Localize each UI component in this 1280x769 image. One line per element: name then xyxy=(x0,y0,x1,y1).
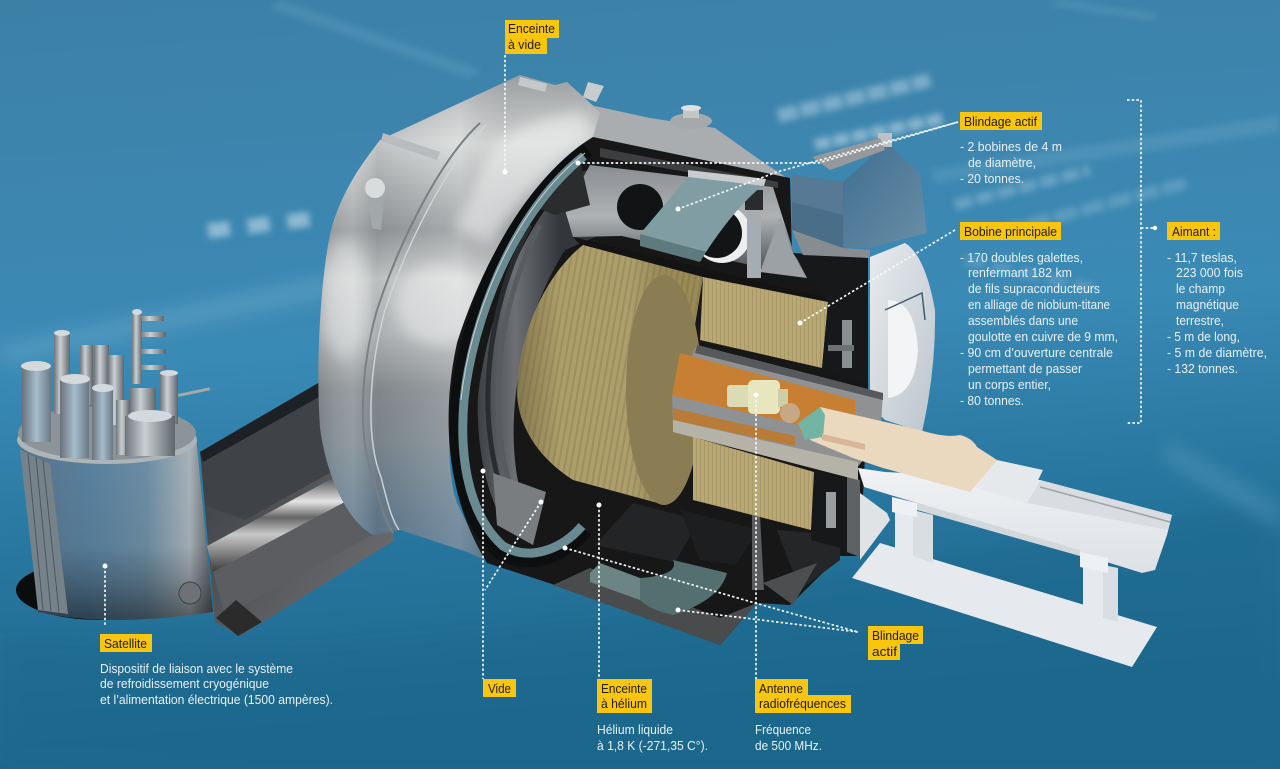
text: satellite details: et l’alimentation électrique (1500 ampères). xyxy=(100,692,333,707)
label: Enceinte à vide: Enceinte xyxy=(508,21,555,36)
text: aimant details: - 5 m de diamètre, xyxy=(1167,345,1267,360)
text: blindage actif details: - 2 bobines de 4 m xyxy=(960,139,1062,154)
text: bobine principale details: un corps entier, xyxy=(968,377,1051,392)
text: satellite details: de refroidissement cryogénique xyxy=(100,676,269,691)
leader lines and anchor dots xyxy=(102,55,958,679)
text: bobine principale details: - 80 tonnes. xyxy=(960,393,1024,408)
main coil (cylinder) xyxy=(517,245,828,530)
label: Satellite: Satellite xyxy=(104,636,147,651)
text: satellite details xyxy=(100,661,333,707)
label: Blindage actif (top): Blindage actif xyxy=(964,114,1037,129)
text: frequency details: Fréquence xyxy=(755,722,811,737)
rear dome behind the cut xyxy=(580,105,790,180)
label: Enceinte à vide: à vide xyxy=(508,37,541,52)
tank-top cylinders xyxy=(54,314,178,455)
label: Enceinte à hélium: Enceinte xyxy=(601,681,647,696)
patient table xyxy=(852,460,1172,667)
satellite pit and pipe xyxy=(200,382,395,636)
white end cap xyxy=(847,243,935,560)
arcs between ring and coil xyxy=(498,225,540,500)
lower cradle shapes xyxy=(595,503,700,562)
text: aimant details: - 5 m de long, xyxy=(1167,329,1240,344)
right-hand electronics block xyxy=(792,133,927,550)
text: blindage actif details: - 20 tonnes. xyxy=(960,171,1024,186)
patient xyxy=(780,403,997,492)
text: bobine principale details: renfermant 182 km xyxy=(968,265,1072,280)
text: bobine principale details: en alliage de niobium-titane xyxy=(968,297,1110,312)
text: satellite details: Dispositif de liaison avec le système xyxy=(100,661,293,676)
text: aimant details: le champ xyxy=(1176,281,1225,296)
text: helium details: Hélium liquide xyxy=(597,722,673,737)
text: bobine principale details xyxy=(960,250,1118,408)
label: Aimant: Aimant : xyxy=(1172,224,1216,239)
label: Blindage actif (bottom) xyxy=(868,626,923,660)
active shielding ring (teal) xyxy=(457,150,588,560)
text: bobine principale details: permettant de passer xyxy=(968,361,1083,376)
label: Antenne radiofréquences xyxy=(755,679,851,713)
active shielding coil: bottom xyxy=(590,560,727,615)
label: Blindage actif (bottom): actif xyxy=(872,644,897,659)
active shielding coil: top xyxy=(640,170,766,262)
label: Vide xyxy=(483,679,516,697)
text: aimant details: 223 000 fois xyxy=(1176,265,1243,280)
label: Enceinte à hélium xyxy=(597,679,652,713)
label: Enceinte à vide xyxy=(505,20,559,54)
text: aimant details: magnétique xyxy=(1176,297,1239,312)
magnet: cut-away interior xyxy=(449,137,868,645)
text: blindage actif details: de diamètre, xyxy=(968,155,1036,170)
label: Enceinte à hélium: à hélium xyxy=(601,696,647,711)
label: Bobine principale: Bobine principale xyxy=(964,224,1057,239)
text: frequency details xyxy=(755,722,822,753)
text: frequency details: de 500 MHz. xyxy=(755,738,822,753)
label: Blindage actif (bottom): Blindage xyxy=(872,628,919,643)
text: aimant details: terrestre, xyxy=(1176,313,1224,328)
text: blindage actif details xyxy=(960,139,1062,186)
left lit area between ring and coil xyxy=(478,170,600,525)
upper bay xyxy=(565,165,807,278)
label: Antenne radiofréquences: Antenne xyxy=(759,681,803,696)
text: bobine principale details: de fils supraconducteurs xyxy=(968,281,1100,296)
text: aimant details xyxy=(1167,250,1267,376)
text: bobine principale details: - 170 doubles galettes, xyxy=(960,250,1083,265)
text: bobine principale details: assemblés dans une xyxy=(968,313,1078,328)
text: aimant details: - 132 tonnes. xyxy=(1167,361,1238,376)
magnet: steel vessel xyxy=(318,75,790,560)
vessel fittings xyxy=(381,133,440,160)
label: Antenne radiofréquences: radiofréquences xyxy=(759,696,846,711)
label: Vide: Vide xyxy=(488,681,511,696)
text: helium details xyxy=(597,722,708,753)
bore with orange lining xyxy=(672,345,883,480)
bracket: aimant xyxy=(1127,100,1157,423)
RF antenna xyxy=(727,380,788,414)
satellite tank xyxy=(16,309,213,620)
text: aimant details: - 11,7 teslas, xyxy=(1167,250,1237,265)
text: helium details: à 1,8 K (-271,35 C°). xyxy=(597,738,708,753)
text: bobine principale details: - 90 cm d’ouverture centrale xyxy=(960,345,1113,360)
text: bobine principale details: goulotte en cuivre de 9 mm, xyxy=(968,329,1118,344)
blurred background lettering xyxy=(208,80,1190,290)
soft highlights on the vessel xyxy=(323,112,592,360)
